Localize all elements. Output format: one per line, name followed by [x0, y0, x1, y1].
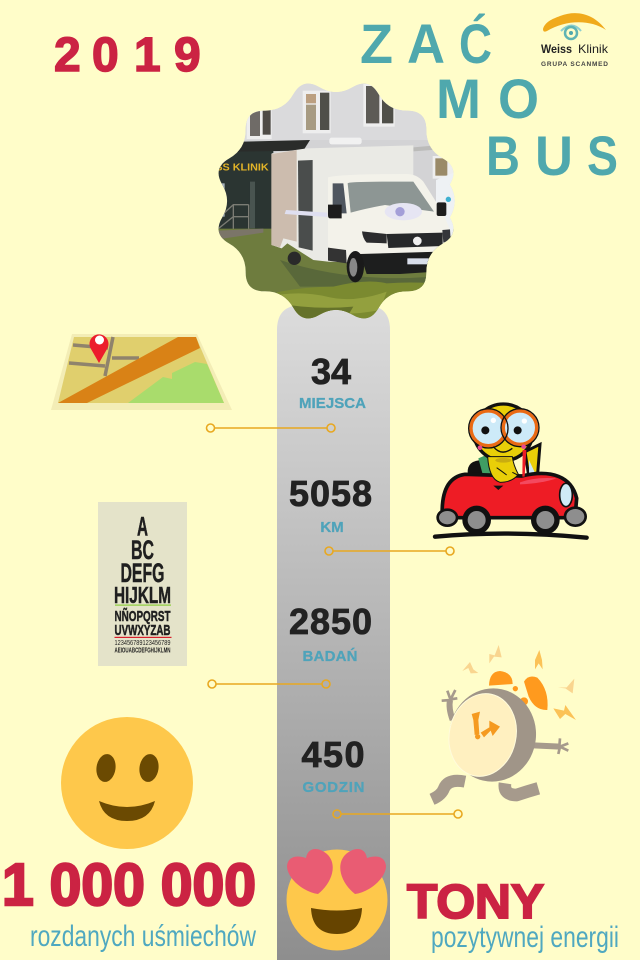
icon: eye chart: NÑOPQRST [114, 607, 170, 625]
year heading: 2 [54, 29, 81, 82]
photo: mobile clinic van in scalloped frame: SS KLINIK [215, 162, 269, 173]
year heading [54, 29, 201, 82]
title: Zaćmobus: B [486, 124, 520, 187]
connector: badań [208, 680, 330, 688]
stat: 5058 km: 5058 [289, 473, 372, 514]
icon: eye chart: BC [131, 535, 154, 565]
title: Zaćmobus: A [407, 12, 445, 75]
title: Zaćmobus: U [535, 124, 573, 187]
stat: 5058 km: KM [320, 519, 344, 536]
year heading: 9 [174, 29, 201, 82]
clinic entrance [218, 148, 274, 230]
icon: running alarm clock [432, 645, 576, 799]
icon: eye chart: UVWXYZAB [114, 622, 171, 639]
icon: smiling face [61, 717, 193, 849]
central grey column [277, 305, 390, 960]
icon: eye chart [98, 502, 187, 666]
big number: 1 000 000: 1 000 000 [2, 852, 256, 918]
connector: miejsca [206, 424, 335, 432]
logo: Weiss Klinik: Klinik [578, 42, 609, 56]
stat: 2850 badań [289, 601, 372, 665]
stat: 450 godzin [302, 734, 364, 796]
big word: TONY: TONY [407, 876, 544, 929]
year heading: 1 [134, 29, 161, 82]
icon: eye chart: 123456789123456789 [114, 638, 170, 647]
stat: 450 godzin: 450 [302, 734, 364, 775]
connector: km [325, 547, 454, 555]
hedge [276, 282, 424, 318]
photo: mobile clinic van in scalloped frame [218, 84, 455, 318]
icon: mascot in red car [435, 404, 587, 538]
connector: godzin [333, 810, 462, 818]
year heading: 0 [92, 29, 119, 82]
logo: Weiss Klinik: Weiss [541, 42, 572, 56]
stat: 2850 badań: 2850 [289, 601, 372, 642]
caption: rozdanych uśmiechów: rozdanych uśmiechów [30, 920, 256, 953]
title: Zaćmobus: M [436, 67, 481, 130]
stat: 450 godzin: GODZIN [302, 779, 364, 796]
title: Zaćmobus: Z [360, 12, 393, 75]
stat: 5058 km [289, 473, 372, 536]
ribbon bow [385, 203, 422, 220]
upper windows [303, 91, 331, 133]
logo: Weiss Klinik: GRUPA SCANMED [541, 61, 608, 68]
stat: 2850 badań: BADAŃ [302, 648, 358, 665]
wheels [347, 251, 364, 282]
icon: eye chart: A [137, 512, 148, 542]
stat: 34 miejsca: MIEJSCA [299, 395, 366, 412]
icon: eye chart: AEIOUABCDEFGHIJKLMN [114, 648, 170, 654]
icon: map with pin [51, 334, 232, 410]
tent [436, 173, 455, 236]
logo: Weiss Klinik [541, 13, 609, 68]
title: Zaćmobus [360, 12, 618, 187]
title: Zaćmobus: O [498, 67, 539, 130]
icon: heart-eyes face [286, 849, 388, 950]
stat: 34 miejsca [299, 351, 366, 412]
icon: eye chart: HIJKLM [114, 582, 171, 608]
title: Zaćmobus: Ć [459, 12, 492, 75]
stat: 34 miejsca: 34 [311, 351, 351, 392]
van box [329, 138, 362, 144]
title: Zaćmobus: S [587, 124, 618, 187]
van cab [328, 174, 451, 263]
lawn [218, 228, 454, 318]
icon: eye chart: DEFG [120, 558, 164, 588]
